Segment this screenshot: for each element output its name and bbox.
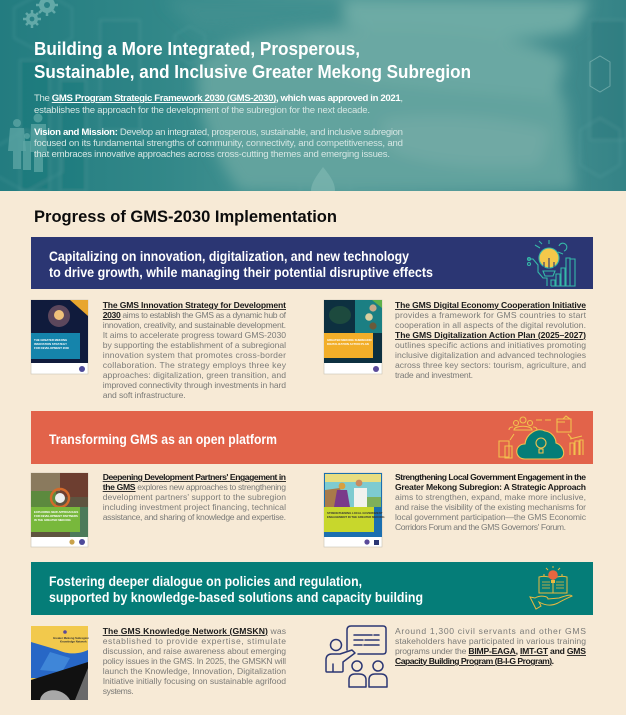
text: digital economy: The GMS Digitalization Action Plan (2025–2027)	[395, 330, 586, 340]
book cover: innovation strategy: THE GREATER MEKONG	[34, 338, 67, 342]
text: development partners: including investment project financing, technical	[103, 502, 286, 512]
panel: innovation band: Capitalizing on innovation, digitalization, and new technology	[49, 249, 409, 264]
text: training programs: programs under the BIMP-EAGA, IMT-GT and GMS	[395, 646, 586, 656]
book cover: knowledge network	[31, 626, 89, 700]
text: digital economy: provides a framework for GMS countries to start	[395, 310, 587, 320]
text: innovation strategy: innovation, creativity, and sustainable development.	[103, 320, 286, 330]
intro text: The GMS Program Strategic Framework 2030 (GMS-2030), which was approved in 2021,	[34, 93, 403, 104]
text: digital economy: The GMS Digital Economy Cooperation Initiative	[395, 300, 586, 310]
book cover: innovation strategy	[31, 300, 88, 374]
text: innovation strategy: approaches: digitalization, green transition, and	[103, 370, 286, 380]
text: local government: Corridors Forum and the GMS Governors' Forum.	[395, 522, 566, 532]
heading: progress: Progress of GMS-2030 Implementation	[34, 207, 337, 226]
text: digital economy: inclusive digitalization and advanced technologies	[395, 350, 586, 360]
panel: innovation band: to drive growth, while managing their potential disruptive effects	[49, 265, 433, 280]
book cover: local government: ENGAGEMENT IN THE GREATER MEKONG	[327, 515, 385, 519]
icon: light bulb and bars	[528, 240, 575, 286]
title: Sustainable, and Inclusive Greater Mekong Subregion	[34, 62, 471, 82]
book cover: local government	[324, 473, 385, 547]
text: training programs: Capacity Building Program (B-I-G Program).	[395, 656, 554, 666]
text: innovation strategy: by supporting the establishment of a subregional	[103, 340, 286, 350]
text: innovation strategy: It aims to accelerate progress toward GMS-2030	[103, 330, 286, 340]
icon: faint water drop	[311, 167, 335, 191]
icon: classroom presenter	[326, 626, 387, 687]
text: development partners	[103, 472, 286, 522]
book cover: development partners: IN THE GREATER MEKONG	[34, 518, 71, 522]
text: local government: local government participation—the GMS Economic	[395, 512, 587, 522]
text: training programs	[395, 626, 586, 666]
intro text	[34, 93, 403, 116]
text: digital economy: trade and investment.	[395, 370, 473, 380]
panel: open platform band: Transforming GMS as an open platform	[49, 431, 277, 447]
book cover: digital economy: GREATER MEKONG SUBREGION	[327, 338, 372, 342]
text: knowledge network: systems.	[103, 686, 134, 696]
panel: dialogue band	[31, 562, 593, 615]
text: training programs: stakeholders have participated in various training	[395, 636, 586, 646]
text: training programs: Around 1,300 civil servants and other GMS	[395, 626, 586, 636]
book cover: innovation strategy: INNOVATION STRATEGY	[34, 342, 67, 346]
text: digital economy: across three key sectors: tourism, agriculture, and	[395, 360, 586, 370]
book cover: innovation strategy: FOR DEVELOPMENT 2030	[34, 346, 69, 350]
book cover: local government: STRENGTHENING LOCAL GOVERNMENT	[327, 511, 383, 515]
text: development partners: assistance, and sharing of knowledge and expertise.	[103, 512, 286, 522]
book cover: digital economy: DIGITALIZATION ACTION PLAN	[327, 342, 369, 346]
book cover: digital economy	[324, 300, 382, 374]
vision and mission: Vision and Mission: Develop an integrated, prosperous, sustainable, and inclusive subregion	[34, 127, 403, 138]
panel: dialogue band: Fostering deeper dialogue on policies and regulation,	[49, 574, 362, 589]
vision and mission: that embraces innovative approaches across cross-cutting themes and emerging issues.	[34, 149, 390, 160]
text: knowledge network: launch the Knowledge, Innovation, Digitalization	[103, 666, 286, 676]
text: innovation strategy: The GMS Innovation Strategy for Development	[103, 300, 286, 310]
icon: recycling hexagon	[590, 56, 610, 92]
text: development partners: development partners' support to the subregion	[103, 492, 286, 502]
text: local government: Strengthening Local Government Engagement in the	[395, 472, 586, 482]
text: knowledge network: policy issues in the GMS. In 2025, the GMSKN will	[103, 656, 286, 666]
text: development partners: Deepening Development Partners' Engagement in	[103, 472, 286, 482]
panel: dialogue band: supported by knowledge-based solutions and capacity building	[49, 590, 423, 605]
book cover: development partners: FOR DEVELOPMENT PARTNERS	[34, 514, 78, 518]
text: knowledge network: discussion, and raise awareness about emerging	[103, 646, 286, 656]
title: Building a More Integrated, Prosperous,	[34, 39, 360, 59]
text: knowledge network	[103, 626, 286, 696]
text: development partners: the GMS explores new approaches to strengthening	[103, 482, 286, 492]
icon: family silhouettes	[8, 114, 47, 172]
text: innovation strategy	[103, 300, 287, 400]
text: innovation strategy: collaboration. The strategy employs three key	[103, 360, 287, 370]
book cover: knowledge network: Greater Mekong Subregion	[53, 636, 89, 640]
icon: gears	[23, 0, 58, 28]
intro text: establishes the approach for the development of the subregion for the next decade.	[34, 105, 370, 116]
text: local government: Greater Mekong Subregion: A Strategic Approach	[395, 482, 586, 492]
vision and mission	[34, 127, 403, 160]
text: local government: aims to strengthen, expand, make more inclusive,	[395, 492, 586, 502]
panel: innovation band	[31, 237, 593, 289]
book cover: knowledge network: Knowledge Network	[60, 640, 87, 644]
icon: cloud and documents	[499, 416, 583, 459]
text: innovation strategy: innovation system that promotes cross-border	[103, 350, 286, 360]
icon: book, bulb and hand	[530, 566, 572, 609]
book cover: development partners	[31, 473, 88, 547]
text: digital economy: outlines specific actions and initiatives promoting	[395, 340, 586, 350]
hero banner: teal photo of clasped hands	[0, 0, 626, 200]
text: knowledge network: established to provide expertise, stimulate	[103, 636, 286, 646]
text: local government: and raise the visibility of the existing mechanisms for	[395, 502, 586, 512]
text: digital economy	[395, 300, 587, 380]
text: innovation strategy: and soft infrastructure.	[103, 390, 186, 400]
title	[34, 39, 471, 82]
text: innovation strategy: 2030 aims to establish the GMS as a dynamic hub of	[103, 310, 287, 320]
text: digital economy: cooperation in all aspects of the digital revolution.	[395, 320, 586, 330]
text: local government	[395, 472, 587, 532]
text: innovation strategy: improved connectivity through investments in hard	[103, 380, 286, 390]
book cover: development partners: EXPLORING NEW APPROACHES	[34, 510, 78, 514]
text: knowledge network: The GMS Knowledge Network (GMSKN) was	[103, 626, 286, 636]
text: knowledge network: Initiative initially focusing on sustainable agrifood	[103, 676, 286, 686]
panel: open platform band	[31, 411, 593, 464]
vision and mission: focused on its fundamental strengths of community, connectivity, and competitiveness, and	[34, 138, 403, 149]
